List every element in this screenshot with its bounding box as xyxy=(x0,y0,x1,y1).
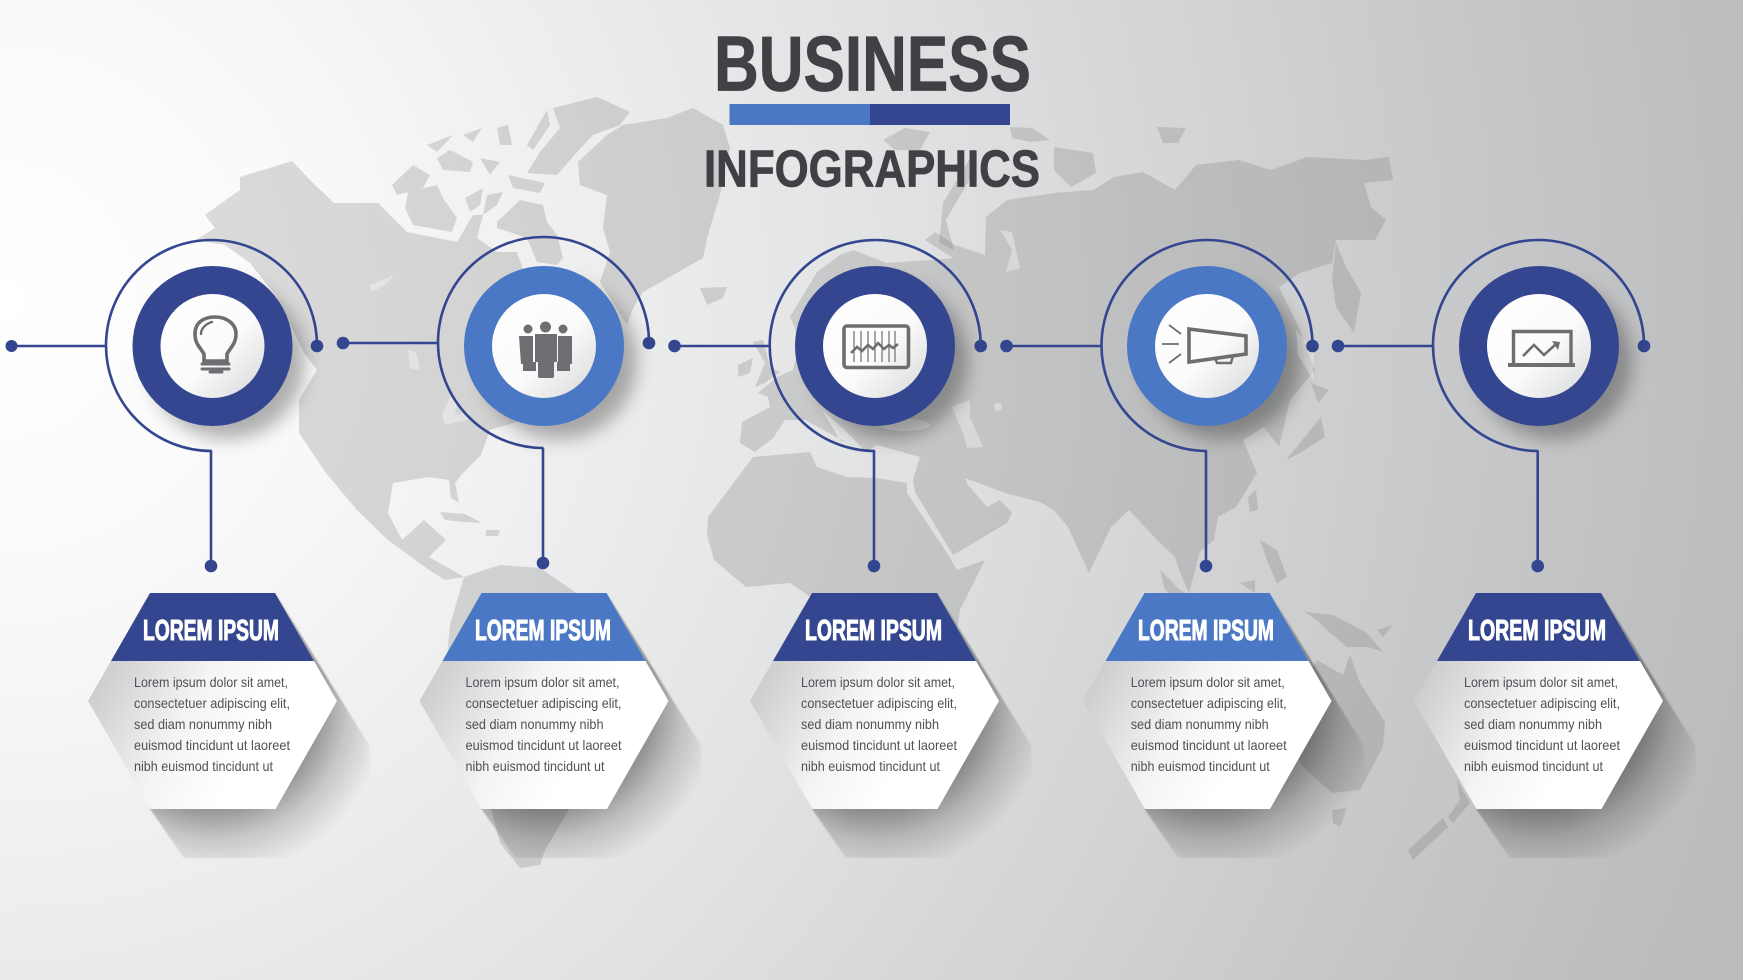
step 3 badge xyxy=(795,266,968,439)
step 5 connector xyxy=(1332,240,1650,572)
icon: megaphone xyxy=(1162,325,1246,363)
card body text: Lorem ipsum dolor sit amet, xyxy=(801,674,955,690)
card header band xyxy=(442,593,646,661)
card header band xyxy=(1437,593,1640,661)
card header band xyxy=(773,593,976,661)
step 1 connector xyxy=(6,240,323,572)
card header band xyxy=(111,593,314,661)
icon: laptop with rising chart xyxy=(1508,332,1575,367)
card heading: LOREM IPSUM xyxy=(1468,615,1606,647)
card body text: consectetuer adipiscing elit, xyxy=(1464,695,1620,711)
card body text xyxy=(1131,674,1287,774)
card body text: euismod tincidunt ut laoreet xyxy=(1464,737,1620,753)
title: BUSINESS: BUSINESS xyxy=(714,20,1031,108)
icon: chart screen xyxy=(844,326,908,368)
panel: step 5 card xyxy=(1414,593,1698,858)
subtitle: INFOGRAPHICS: INFOGRAPHICS xyxy=(704,140,1040,198)
card body text: Lorem ipsum dolor sit amet, xyxy=(1131,674,1285,690)
map lakes and inland seas xyxy=(370,230,1314,448)
card heading: LOREM IPSUM xyxy=(143,615,279,647)
card body text xyxy=(466,674,622,774)
card body text: nibh euismod tincidunt ut xyxy=(466,758,605,774)
step 5 badge xyxy=(1459,266,1632,439)
card body text: consectetuer adipiscing elit, xyxy=(466,695,622,711)
card body text: Lorem ipsum dolor sit amet, xyxy=(134,674,288,690)
step 2 connector xyxy=(337,237,655,569)
card body text: nibh euismod tincidunt ut xyxy=(801,758,940,774)
step 1 badge xyxy=(132,266,305,439)
panel: step 2 card xyxy=(420,593,704,858)
icon: light bulb xyxy=(195,317,236,372)
card body text xyxy=(801,674,957,774)
card body text: consectetuer adipiscing elit, xyxy=(801,695,957,711)
card header band xyxy=(1106,593,1308,661)
title underline bar xyxy=(730,104,1010,125)
card heading: LOREM IPSUM xyxy=(1138,615,1274,647)
card body text: sed diam nonummy nibh xyxy=(466,716,604,732)
icon: group of people xyxy=(519,322,572,378)
card body text: sed diam nonummy nibh xyxy=(1131,716,1269,732)
panel: step 3 card xyxy=(750,593,1034,858)
card body text: sed diam nonummy nibh xyxy=(1464,716,1602,732)
panel: step 1 card xyxy=(88,593,372,858)
card heading: LOREM IPSUM xyxy=(805,615,942,647)
card body text: consectetuer adipiscing elit, xyxy=(1131,695,1287,711)
card body text xyxy=(134,674,290,774)
card body text: Lorem ipsum dolor sit amet, xyxy=(1464,674,1618,690)
card body text: nibh euismod tincidunt ut xyxy=(134,758,273,774)
panel: step 4 card xyxy=(1082,593,1366,858)
card body text: sed diam nonummy nibh xyxy=(134,716,272,732)
card body text: euismod tincidunt ut laoreet xyxy=(801,737,957,753)
card body text: euismod tincidunt ut laoreet xyxy=(134,737,290,753)
card body text: Lorem ipsum dolor sit amet, xyxy=(466,674,620,690)
card body text: euismod tincidunt ut laoreet xyxy=(1131,737,1287,753)
step 2 badge xyxy=(464,266,637,439)
step 3 connector xyxy=(668,240,987,572)
card body text: euismod tincidunt ut laoreet xyxy=(466,737,622,753)
card body text: nibh euismod tincidunt ut xyxy=(1131,758,1270,774)
card body text: sed diam nonummy nibh xyxy=(801,716,939,732)
step 4 connector xyxy=(1000,240,1319,572)
card body text xyxy=(1464,674,1620,774)
world map xyxy=(196,97,1470,868)
card body text: nibh euismod tincidunt ut xyxy=(1464,758,1603,774)
step 4 badge xyxy=(1127,266,1300,439)
card body text: consectetuer adipiscing elit, xyxy=(134,695,290,711)
card heading: LOREM IPSUM xyxy=(475,615,611,647)
